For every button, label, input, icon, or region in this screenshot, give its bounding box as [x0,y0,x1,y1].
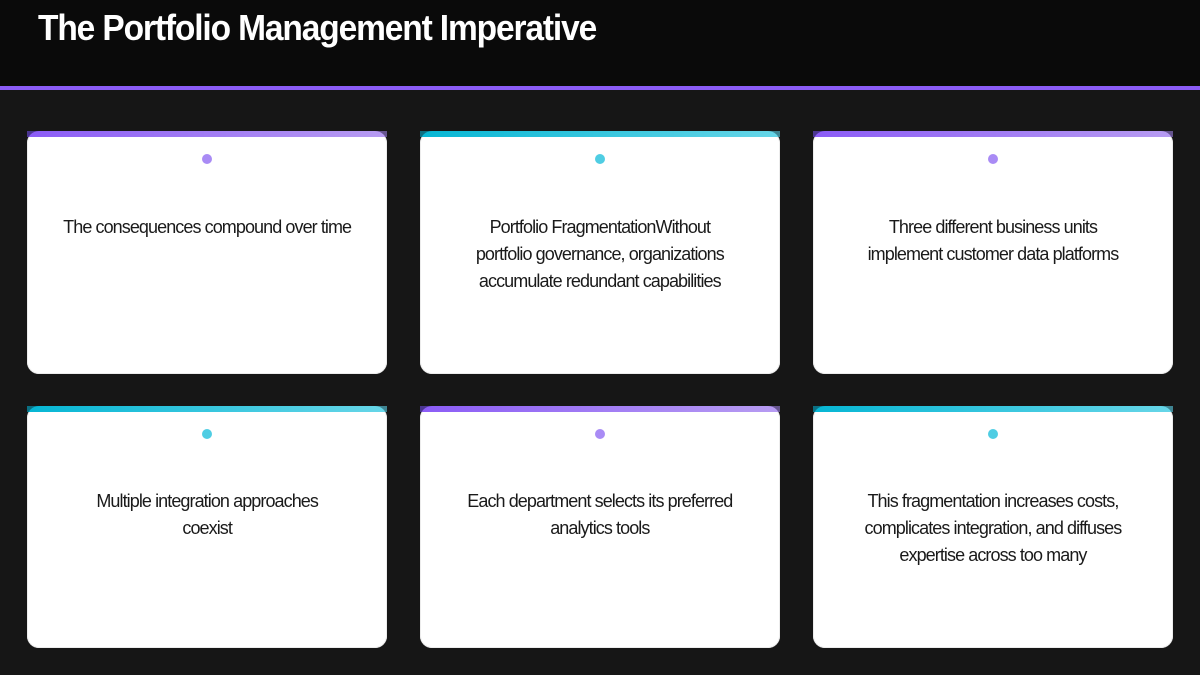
accent bar: purple [27,131,387,137]
text: integration approaches: Multiple integration approaches [96,491,318,511]
header band [0,0,1200,86]
panel: integration approaches [27,406,387,648]
text: analytics tools: Each department selects its preferred [467,491,732,511]
panel: fragmentation costs [813,406,1173,648]
text: fragmentation costs [865,491,1122,565]
text: portfolio fragmentation [476,217,724,291]
icon: purple dot [595,428,605,438]
text: portfolio fragmentation: portfolio governance, organizations [476,244,724,264]
text: business units: Three different business units [889,217,1097,237]
text: portfolio fragmentation: Portfolio FragmentationWithout [490,217,710,237]
icon: purple dot [988,154,998,164]
panel: portfolio fragmentation [420,131,780,374]
accent bar: cyan [420,131,780,137]
icon: cyan dot [988,428,998,438]
header accent rule [0,86,1200,90]
icon: purple dot [202,154,212,164]
text: consequences: The consequences compound over time [63,217,351,237]
panel: business units [813,131,1173,374]
panel: analytics tools [420,406,780,648]
accent bar: cyan [813,406,1173,412]
title: The Portfolio Management Imperative [38,7,596,48]
text: fragmentation costs: complicates integration, and diffuses [865,518,1121,538]
text: fragmentation costs: expertise across too many [899,545,1087,565]
text: fragmentation costs: This fragmentation increases costs, [867,491,1118,511]
accent bar: purple [420,406,780,412]
icon: cyan dot [595,154,605,164]
icon: cyan dot [202,428,212,438]
text: integration approaches: coexist [182,518,232,538]
text: business units [868,217,1119,264]
text: portfolio fragmentation: accumulate redundant capabilities [479,271,721,291]
accent bar: purple [813,131,1173,137]
text: analytics tools [467,491,732,538]
text: integration approaches [96,491,318,538]
text: analytics tools: analytics tools [550,518,649,538]
panel: consequences [27,131,387,374]
text: business units: implement customer data platforms [868,244,1118,264]
accent bar: cyan [27,406,387,412]
